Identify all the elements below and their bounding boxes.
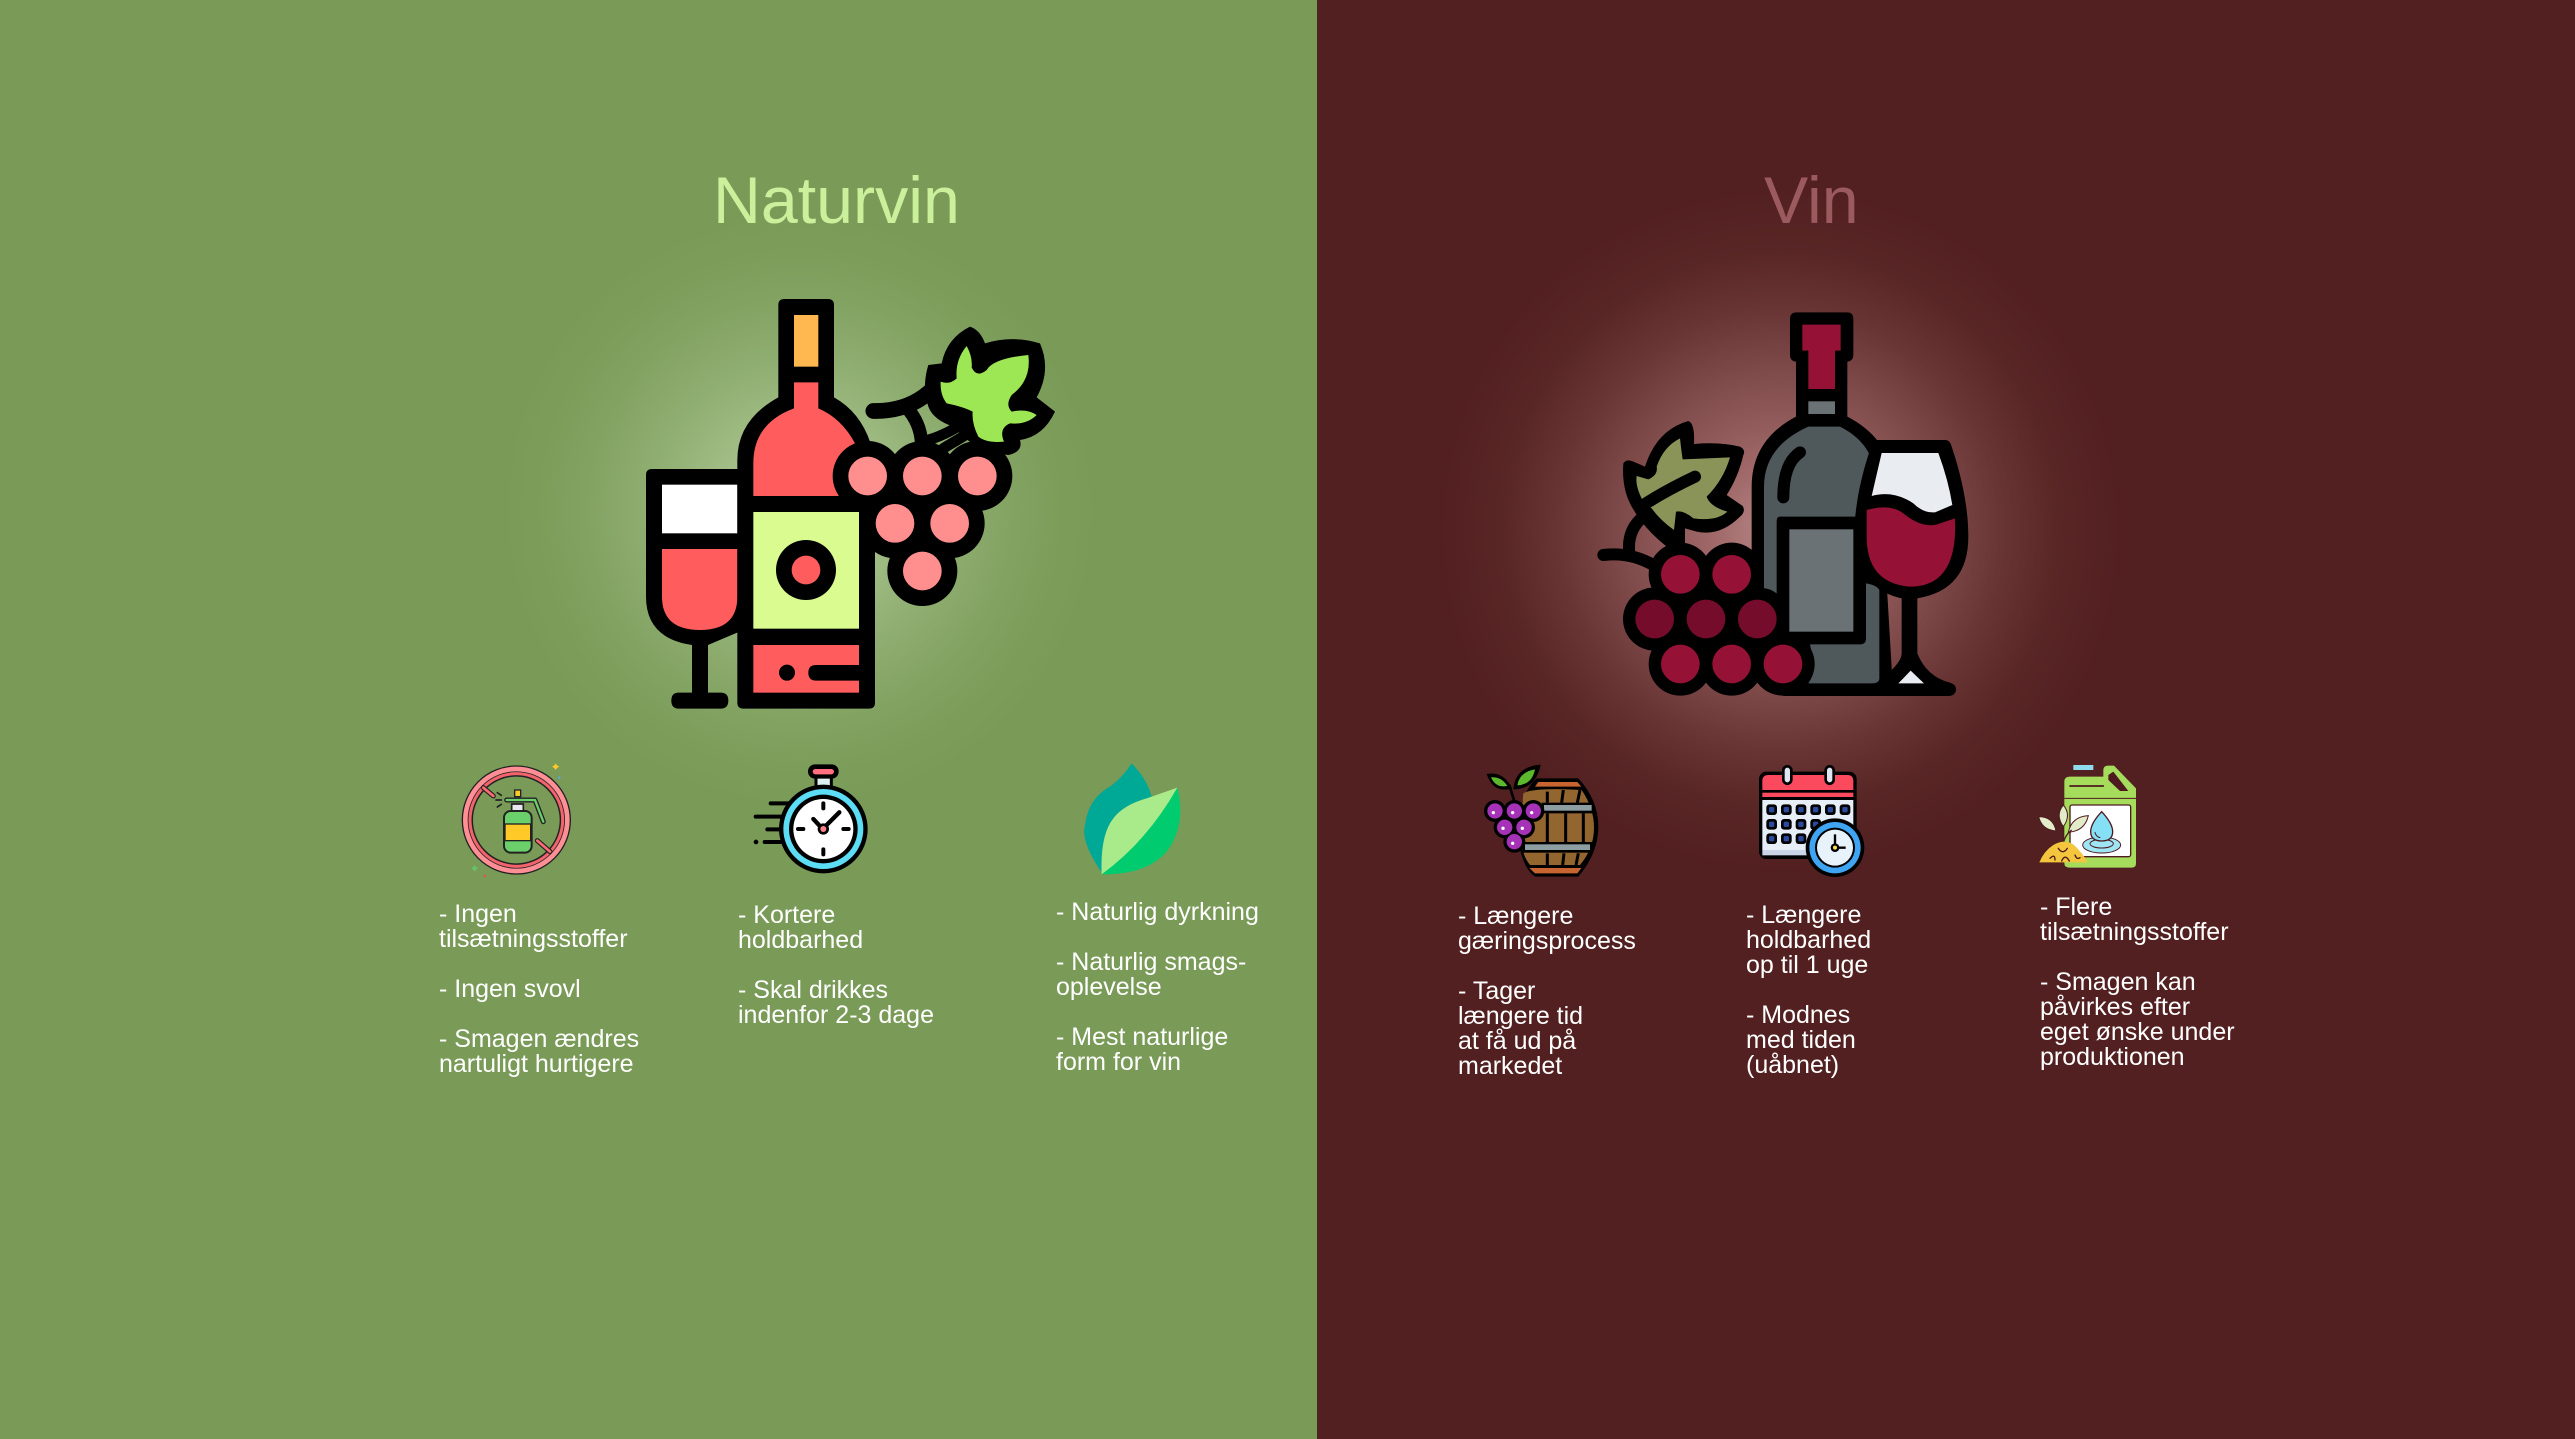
icon: rosé bottle, glass and grapes [646, 299, 1055, 709]
text: column 2: med tiden [1746, 1026, 1856, 1054]
text: column 3: oplevelse [1056, 973, 1162, 1001]
title: Vin: Vin [1764, 164, 1859, 238]
text: column 2: (uåbnet) [1746, 1051, 1839, 1079]
text: column 2: - Længere [1746, 901, 1861, 929]
text: column 1: længere tid [1458, 1002, 1583, 1030]
text: column 2 [1746, 901, 1871, 1079]
text: column 2: - Kortere [738, 901, 835, 929]
icon: stopwatch [754, 764, 868, 873]
text: column 2: - Modnes [1746, 1001, 1850, 1029]
text: column 3 [2040, 893, 2235, 1071]
text: column 1: markedet [1458, 1052, 1562, 1080]
text: column 1: - Længere [1458, 902, 1573, 930]
text: column 3: eget ønske under [2040, 1018, 2235, 1046]
text: column 2: op til 1 uge [1746, 951, 1868, 979]
icon: red wine bottle, glass and grapes [1603, 312, 1968, 696]
text: column 1 [439, 900, 639, 1078]
text: column 2: - Skal drikkes [738, 976, 888, 1004]
text: column 1: - Ingen [439, 900, 517, 928]
text: column 3: produktionen [2040, 1043, 2185, 1071]
icon: no additives spray bottle [465, 763, 567, 877]
text: column 1: - Tager [1458, 977, 1535, 1005]
text: column 2: holdbarhed [738, 926, 863, 954]
text: column 1: tilsætningsstoffer [439, 925, 628, 953]
panel: Naturvin [0, 0, 1317, 1439]
text: column 3: - Smagen kan [2040, 968, 2196, 996]
text: column 1: at få ud på [1458, 1027, 1576, 1055]
text: column 1: gæringsprocess [1458, 927, 1636, 955]
text: column 3: - Flere [2040, 893, 2112, 921]
text: column 3 [1056, 898, 1259, 1076]
text: column 3: form for vin [1056, 1048, 1181, 1076]
panel: Vin [1317, 0, 2575, 1439]
icon: additive canister [2039, 765, 2136, 868]
text: column 2 [738, 901, 934, 1029]
text: column 3: - Naturlig dyrkning [1056, 898, 1259, 926]
text: column 2: indenfor 2-3 dage [738, 1001, 934, 1029]
text: column 3: - Mest naturlige [1056, 1023, 1228, 1051]
text: column 3: påvirkes efter [2040, 993, 2190, 1021]
title: Naturvin: Naturvin [713, 164, 960, 238]
icon: green leaves [1084, 763, 1180, 875]
text: column 1: - Ingen svovl [439, 975, 581, 1003]
text: column 3: - Naturlig smags- [1056, 948, 1246, 976]
icon: calendar with clock [1759, 765, 1864, 877]
text: column 1 [1458, 902, 1636, 1080]
text: column 1: nartuligt hurtigere [439, 1050, 634, 1078]
text: column 3: tilsætningsstoffer [2040, 918, 2229, 946]
icon: barrel with grapes [1484, 765, 1598, 877]
text: column 2: holdbarhed [1746, 926, 1871, 954]
text: column 1: - Smagen ændres [439, 1025, 639, 1053]
